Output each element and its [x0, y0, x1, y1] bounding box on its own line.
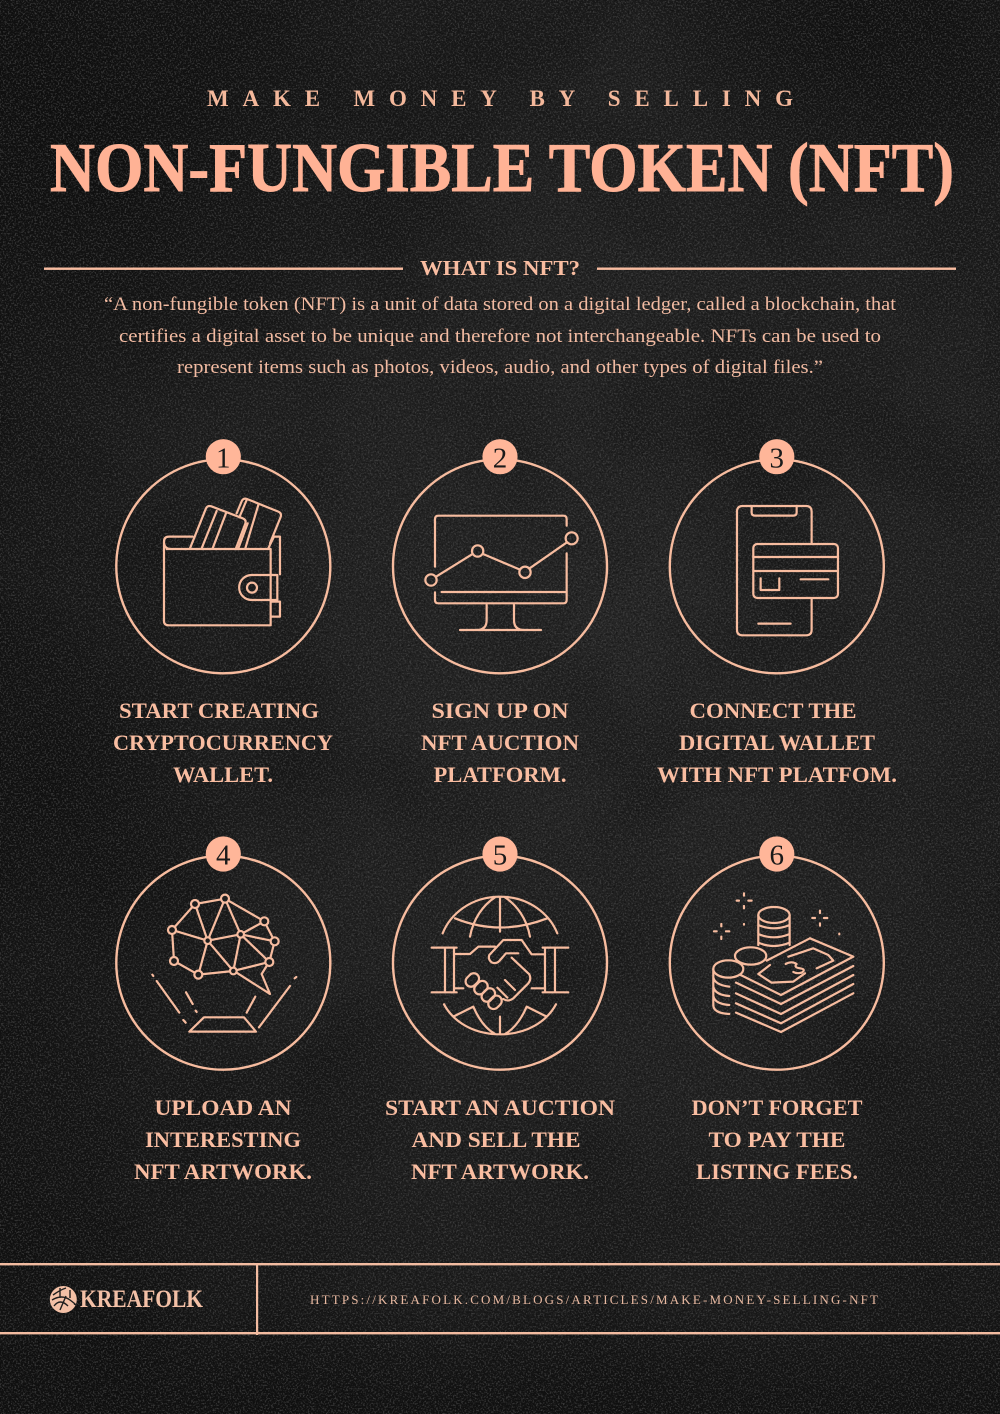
url: HTTPS://KREAFOLK.COM/BLOGS/ARTICLES/MAKE-MONEY-SELLING-NFT [310, 1292, 878, 1307]
label 3: CONNECT THE [690, 698, 856, 723]
label 3 [657, 698, 897, 787]
number badge 6: 6 [770, 840, 784, 872]
subtitle: MAKE MONEY BY SELLING [207, 86, 793, 111]
label 5: AND SELL THE [412, 1127, 580, 1152]
definition text block: represent items such as photos, videos, audio, and other types of digital files.” [177, 358, 823, 378]
label 3: DIGITAL WALLET [679, 730, 875, 755]
number badge 3: 3 [770, 442, 784, 474]
icon: phone and credit card [737, 506, 838, 635]
number badge 4: 4 [216, 840, 231, 872]
definition text block [104, 295, 897, 378]
icon: banknotes and coins [713, 893, 853, 1032]
label 2: PLATFORM. [434, 762, 566, 787]
label 1: WALLET. [173, 762, 273, 787]
label 2: SIGN UP ON [432, 698, 569, 723]
label 4: UPLOAD AN [154, 1095, 292, 1120]
footer [0, 1263, 1000, 1335]
number badge 5: 5 [493, 840, 507, 872]
label 4 [134, 1095, 312, 1184]
definition text block: certifies a digital asset to be unique and therefore not interchangeable. NFTs can be used to [119, 327, 881, 347]
icon: network brain hologram [152, 895, 296, 1032]
label 5 [385, 1095, 615, 1184]
icon: wallet [164, 499, 281, 625]
label 1: START CREATING [119, 698, 319, 723]
step 1 [113, 439, 333, 787]
step 2 [393, 439, 607, 787]
label 4: NFT ARTWORK. [134, 1159, 312, 1184]
section heading: what is NFT: WHAT IS NFT? [420, 256, 580, 280]
number badge 4 [206, 836, 241, 872]
label 5: NFT ARTWORK. [411, 1159, 589, 1184]
label 6: LISTING FEES. [696, 1159, 858, 1184]
step 5 [385, 836, 615, 1184]
step 3 [657, 439, 897, 787]
number badge 5 [482, 836, 518, 872]
label 1 [113, 698, 333, 787]
number badge 1: 1 [216, 442, 231, 474]
label 4: INTERESTING [145, 1127, 301, 1152]
number badge 3 [759, 439, 794, 474]
number badge 1 [206, 439, 241, 474]
step 4 [116, 836, 330, 1184]
number badge 6 [759, 836, 794, 872]
step 6 [670, 836, 884, 1184]
label 6: DON’T FORGET [692, 1095, 863, 1120]
label 5: START AN AUCTION [385, 1095, 615, 1120]
label 2 [421, 698, 579, 787]
label 3: WITH NFT PLATFOM. [657, 762, 897, 787]
definition text block: “A non-fungible token (NFT) is a unit of data stored on a digital ledger, called a blockchain, that [104, 295, 897, 315]
label 6: TO PAY THE [708, 1127, 846, 1152]
label 2: NFT AUCTION [421, 730, 579, 755]
label 1: CRYPTOCURRENCY [113, 730, 333, 755]
logo: KREAFOLK [80, 1286, 203, 1313]
icon: monitor with line chart [425, 516, 578, 630]
label 6 [692, 1095, 863, 1184]
number badge 2: 2 [493, 442, 507, 474]
number badge 2 [482, 439, 518, 474]
icon: handshake and globe [432, 897, 568, 1034]
